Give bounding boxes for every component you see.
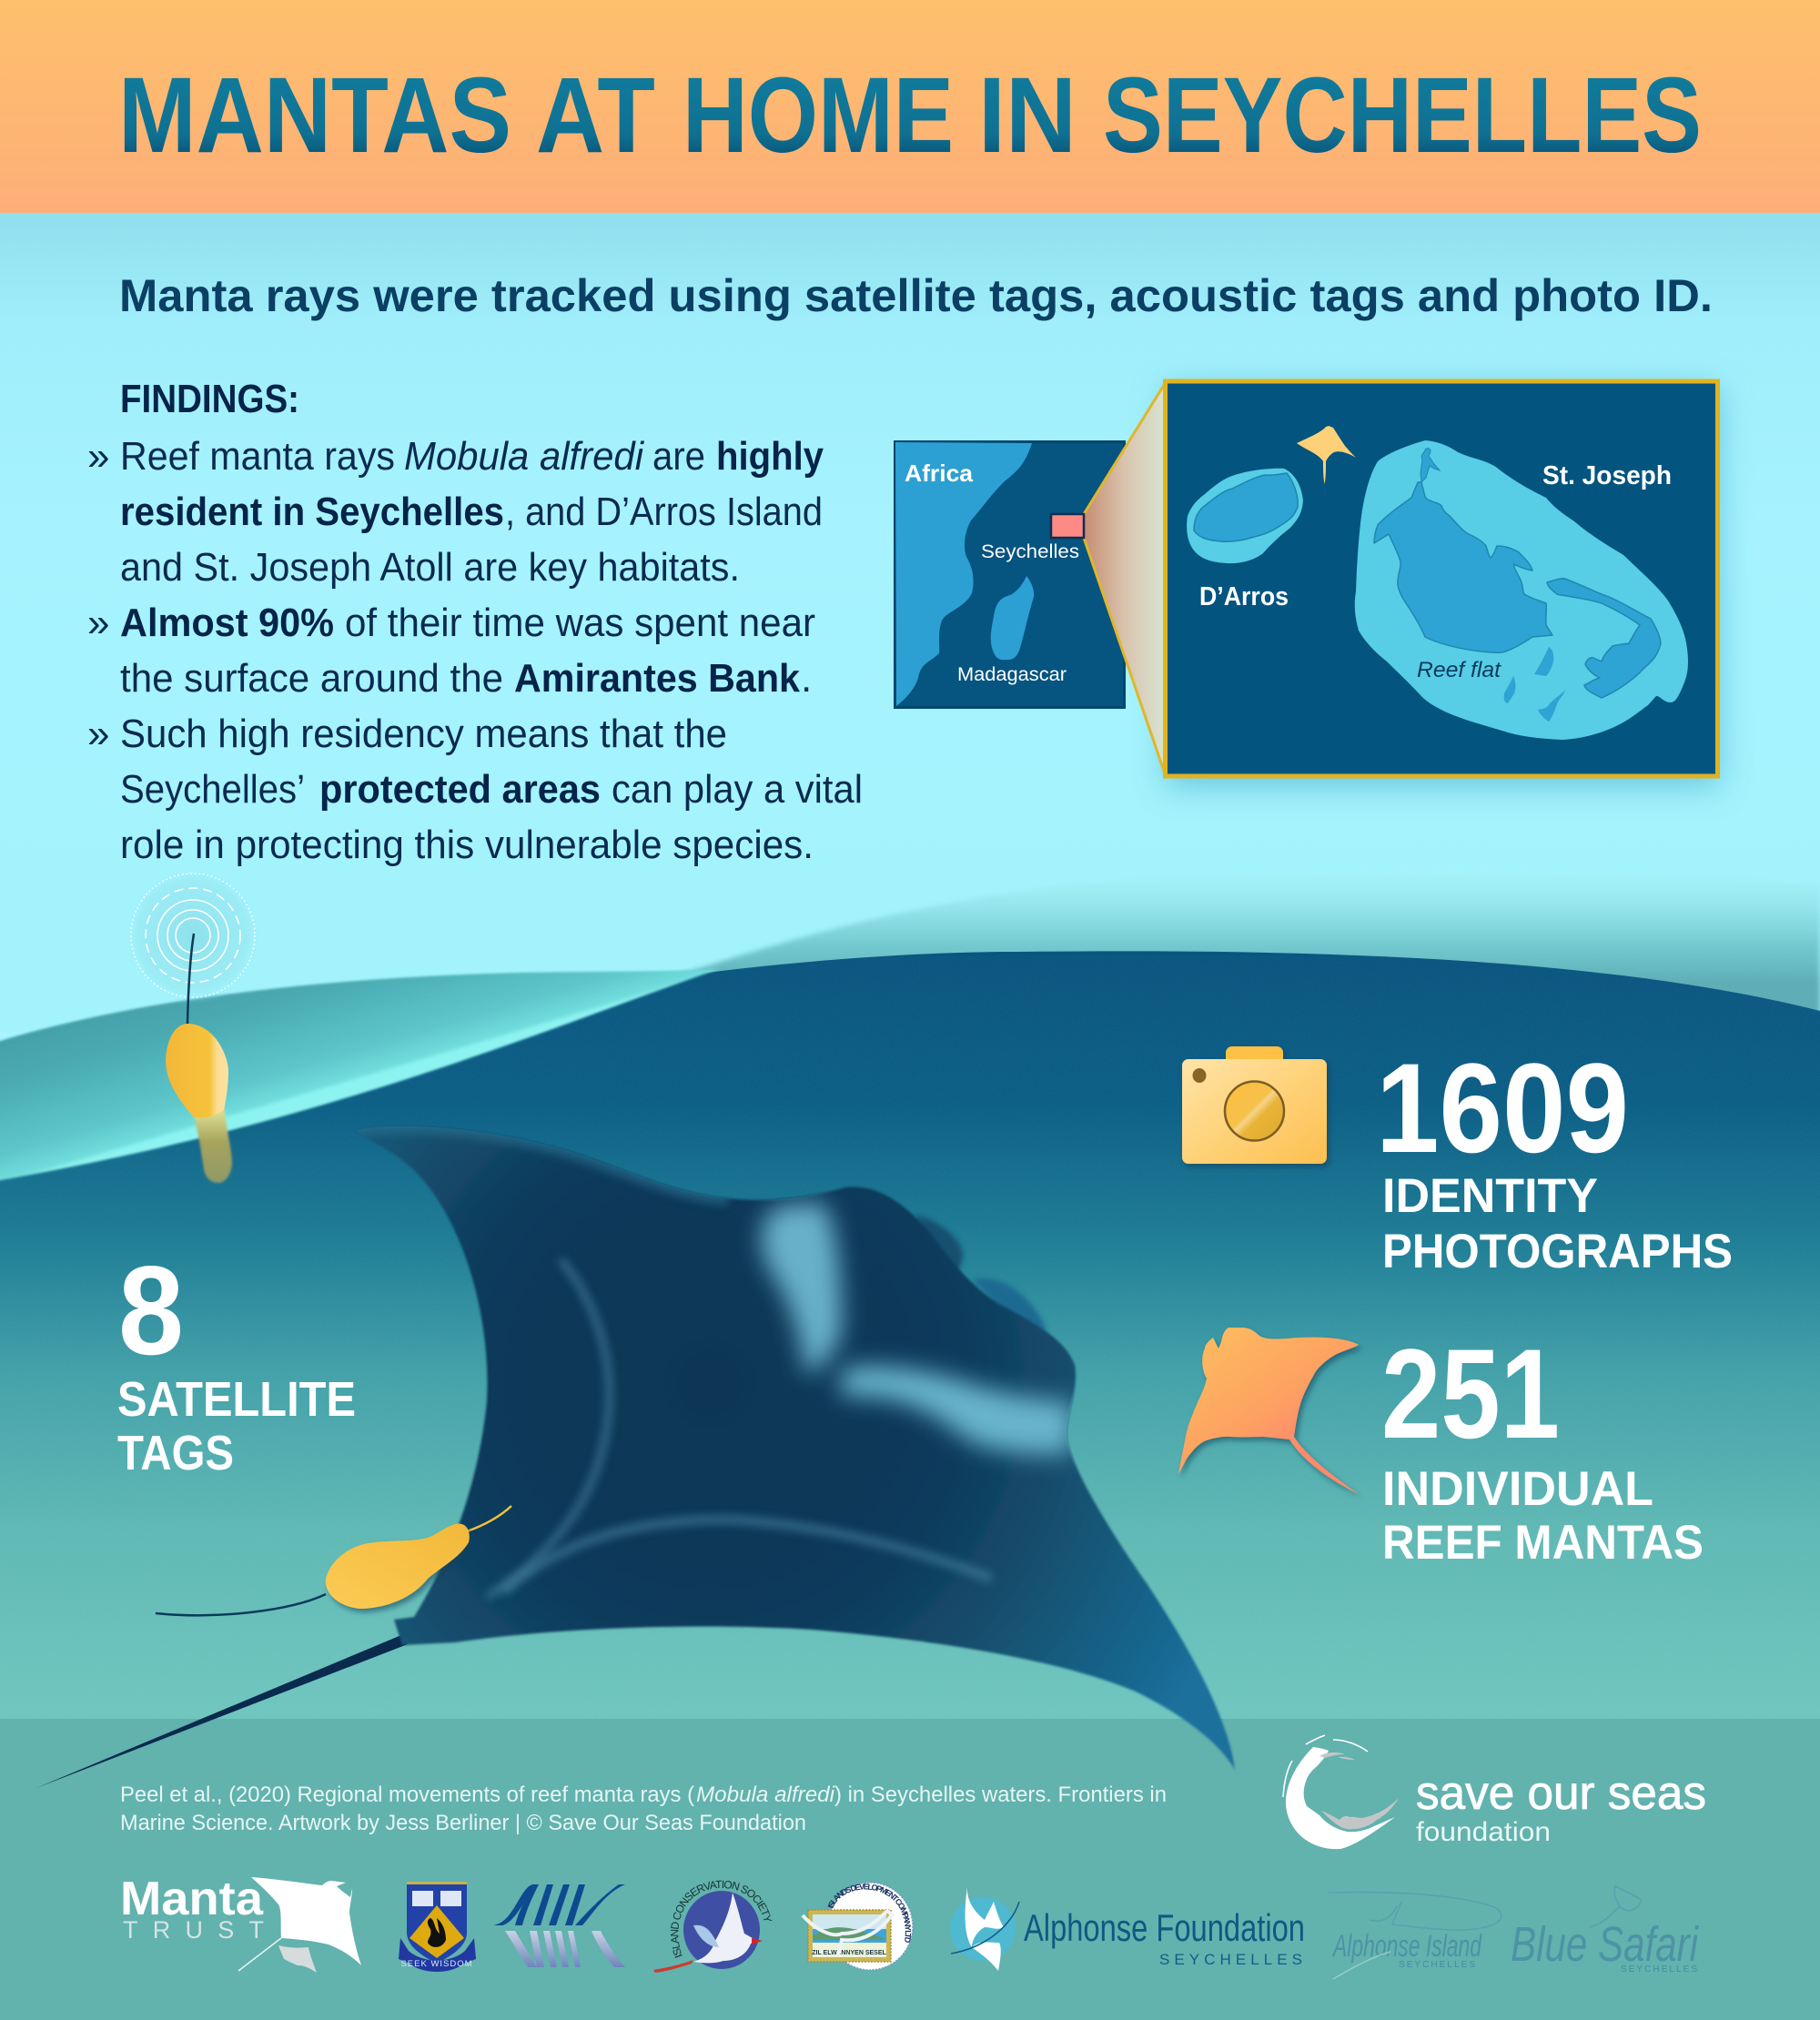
finding 3: Seychelles’ xyxy=(120,767,305,812)
stat: individual reef mantas: 251 xyxy=(1381,1322,1560,1465)
title: IN xyxy=(978,56,1077,176)
stat: satellite tags xyxy=(117,1240,356,1480)
cephalic lobes xyxy=(915,1215,1046,1333)
citation: ) in Seychelles waters. Frontiers in xyxy=(834,1783,1167,1807)
title xyxy=(118,56,1702,176)
stat: identity photographs xyxy=(1376,1036,1733,1278)
finding 2: Almost 90% xyxy=(120,601,334,645)
deep water background xyxy=(0,951,1820,1719)
connector wedge xyxy=(1084,382,1166,776)
finding 1: , and D’Arros Island xyxy=(505,490,823,534)
Madagascar xyxy=(991,576,1034,660)
stat: individual reef mantas: INDIVIDUAL xyxy=(1382,1462,1653,1516)
film grain over water xyxy=(0,955,1820,1719)
title: SEYCHELLES xyxy=(1103,56,1702,176)
finding 2: the surface around the xyxy=(120,656,503,701)
locator map: Madagascar xyxy=(957,664,1067,685)
finding 3: » xyxy=(87,712,109,756)
finding 2: Amirantes Bank xyxy=(514,656,800,701)
finding 1: Reef manta rays xyxy=(120,434,395,479)
stat: identity photographs: PHOTOGRAPHS xyxy=(1382,1225,1733,1278)
finding 2 xyxy=(87,601,815,701)
Africa landmass xyxy=(895,442,1032,706)
ribbon xyxy=(399,1938,476,1972)
front wave xyxy=(0,969,719,1187)
locator square xyxy=(1051,514,1084,538)
back wave xyxy=(628,869,1820,1024)
icon: orange manta xyxy=(1178,1328,1359,1494)
books xyxy=(412,1891,433,1906)
white seal xyxy=(827,1883,913,1970)
small reef patches xyxy=(1534,647,1553,676)
finding 1 xyxy=(87,434,824,590)
large manta xyxy=(251,1877,361,1965)
citation: Marine Science. Artwork by Jess Berliner | © Save Our Seas Foundation xyxy=(120,1811,806,1835)
stat: individual reef mantas: REEF MANTAS xyxy=(1382,1516,1704,1570)
stat: identity photographs: 1609 xyxy=(1376,1036,1629,1179)
logo: Manta Trust: Manta xyxy=(120,1873,264,1925)
logo: Save Our Seas Foundation: foundation xyxy=(1416,1817,1551,1847)
finding 2: . xyxy=(801,656,812,701)
frame shadow xyxy=(1166,389,1719,786)
locator map: Seychelles xyxy=(981,541,1079,562)
map: locator and atoll inset xyxy=(894,381,1719,786)
logo: Alphonse Foundation: SEYCHELLES xyxy=(1159,1951,1302,1968)
logo: Islands Development Company xyxy=(801,1882,914,1971)
wordmark: Alphonse Foundation xyxy=(1024,1906,1305,1949)
inset labels: St. Joseph xyxy=(1542,461,1672,490)
atoll inset map xyxy=(1165,381,1718,776)
stat: satellite tags: TAGS xyxy=(117,1426,234,1480)
logo: Save Our Seas Foundation xyxy=(1283,1735,1706,1849)
locator map xyxy=(894,382,1166,776)
D'Arros island xyxy=(1187,469,1303,563)
crescent mark xyxy=(1283,1735,1399,1849)
northern islet xyxy=(1421,449,1440,482)
header band xyxy=(0,0,1820,213)
logo: Alphonse Foundation xyxy=(950,1887,1305,1971)
finding 1: and St. Joseph Atoll are key habitats. xyxy=(120,545,740,590)
dorsal markings xyxy=(355,1126,1073,1597)
finding 3: role in protecting this vulnerable species. xyxy=(120,823,814,867)
signal rings xyxy=(124,866,262,1005)
boat mark xyxy=(1329,1893,1502,1930)
stat: identity photographs: IDENTITY xyxy=(1382,1169,1598,1223)
upper strokes xyxy=(493,1884,625,1925)
St Joseph atoll xyxy=(1355,440,1688,740)
wordmark: save our seas xyxy=(1416,1767,1706,1820)
finding 1: » xyxy=(87,434,109,479)
finding 3: can play a vital xyxy=(612,767,863,812)
logo: Island Conservation Society xyxy=(653,1880,772,1973)
icon: camera xyxy=(1182,1046,1327,1164)
logo: Alphonse Island xyxy=(1329,1893,1502,1979)
finding 3: protected areas xyxy=(319,767,601,812)
finding 2: of their time was spent near xyxy=(345,601,815,645)
title: AT xyxy=(536,56,655,176)
finding 3 xyxy=(87,712,863,867)
body xyxy=(355,1126,1235,1770)
stat: individual reef mantas xyxy=(1381,1322,1704,1570)
satellite tag at surface xyxy=(124,866,262,1183)
red tail and beak xyxy=(653,1960,693,1973)
small manta xyxy=(278,1945,317,1973)
subtitle: Manta rays were tracked using satellite tags, acoustic tags and photo ID. xyxy=(119,270,1713,321)
citation: Peel et al., (2020) Regional movements of reef manta rays ( xyxy=(120,1783,694,1807)
logo: Islands Development Company: ZIL ELWANNYEN SESEL xyxy=(812,1950,886,1956)
tail xyxy=(36,1635,408,1788)
motto: SEEK WISDOM xyxy=(400,1959,473,1969)
wordmark: Blue Safari xyxy=(1511,1917,1700,1972)
manta ray illustration xyxy=(36,1126,1235,1788)
logo: AIMS xyxy=(493,1884,625,1967)
manta swirl xyxy=(1590,1886,1642,1927)
finding 3: Such high residency means that the xyxy=(120,712,727,756)
finding 1: are xyxy=(652,434,705,479)
tag body xyxy=(326,1523,470,1609)
sky background xyxy=(0,213,1820,1032)
citation: Mobula alfredi xyxy=(696,1783,835,1807)
title: HOME xyxy=(682,56,954,176)
swash xyxy=(803,1911,892,1956)
finding 2: » xyxy=(87,601,109,645)
small manta icon xyxy=(1297,426,1356,484)
trailing line xyxy=(156,1594,326,1615)
central lagoon xyxy=(1374,482,1552,652)
finding 1: highly xyxy=(716,434,824,479)
logo: Blue Safari: SEYCHELLES xyxy=(1621,1964,1697,1975)
tag stem xyxy=(193,1108,232,1183)
logo: Blue Safari xyxy=(1511,1886,1700,1975)
wordmark: Alphonse Island xyxy=(1332,1929,1482,1964)
icon xyxy=(950,1887,1019,1971)
seal text: ISLANDS DEVELOPMENT COMPANY LTD xyxy=(828,1884,912,1943)
antenna xyxy=(187,934,194,1024)
logo: Manta Trust: TRUST xyxy=(123,1916,264,1944)
lower strokes xyxy=(505,1931,625,1967)
shield xyxy=(407,1882,467,1964)
stat: satellite tags: SATELLITE xyxy=(117,1372,356,1427)
antenna xyxy=(467,1506,511,1531)
logo: university crest xyxy=(399,1882,476,1972)
blue disc xyxy=(683,1891,760,1969)
citation xyxy=(120,1783,1167,1835)
finding 1: resident in Seychelles xyxy=(120,490,504,534)
tag on the manta xyxy=(156,1506,511,1615)
ring text: ISLAND CONSERVATION SOCIETY xyxy=(671,1880,772,1958)
locator labels: Africa xyxy=(905,460,974,487)
tag body xyxy=(166,1024,228,1117)
eastern lagoon xyxy=(1547,579,1661,698)
title: MANTAS xyxy=(118,56,511,176)
finding 1: Mobula alfredi xyxy=(404,434,644,479)
gold field xyxy=(410,1905,464,1958)
stat: satellite tags: 8 xyxy=(118,1240,184,1381)
bird xyxy=(693,1893,757,1963)
black swan xyxy=(428,1918,446,1947)
logo: Manta Trust xyxy=(120,1873,361,1973)
findings text block xyxy=(87,377,863,867)
findings heading: FINDINGS: xyxy=(120,377,299,421)
atoll inset map: D’Arros xyxy=(1199,582,1289,611)
atoll inset map: Reef flat xyxy=(1417,658,1502,682)
logo: Alphonse Island: SEYCHELLES xyxy=(1399,1960,1475,1970)
stamp xyxy=(808,1910,891,1962)
footer band xyxy=(0,1719,1820,2020)
